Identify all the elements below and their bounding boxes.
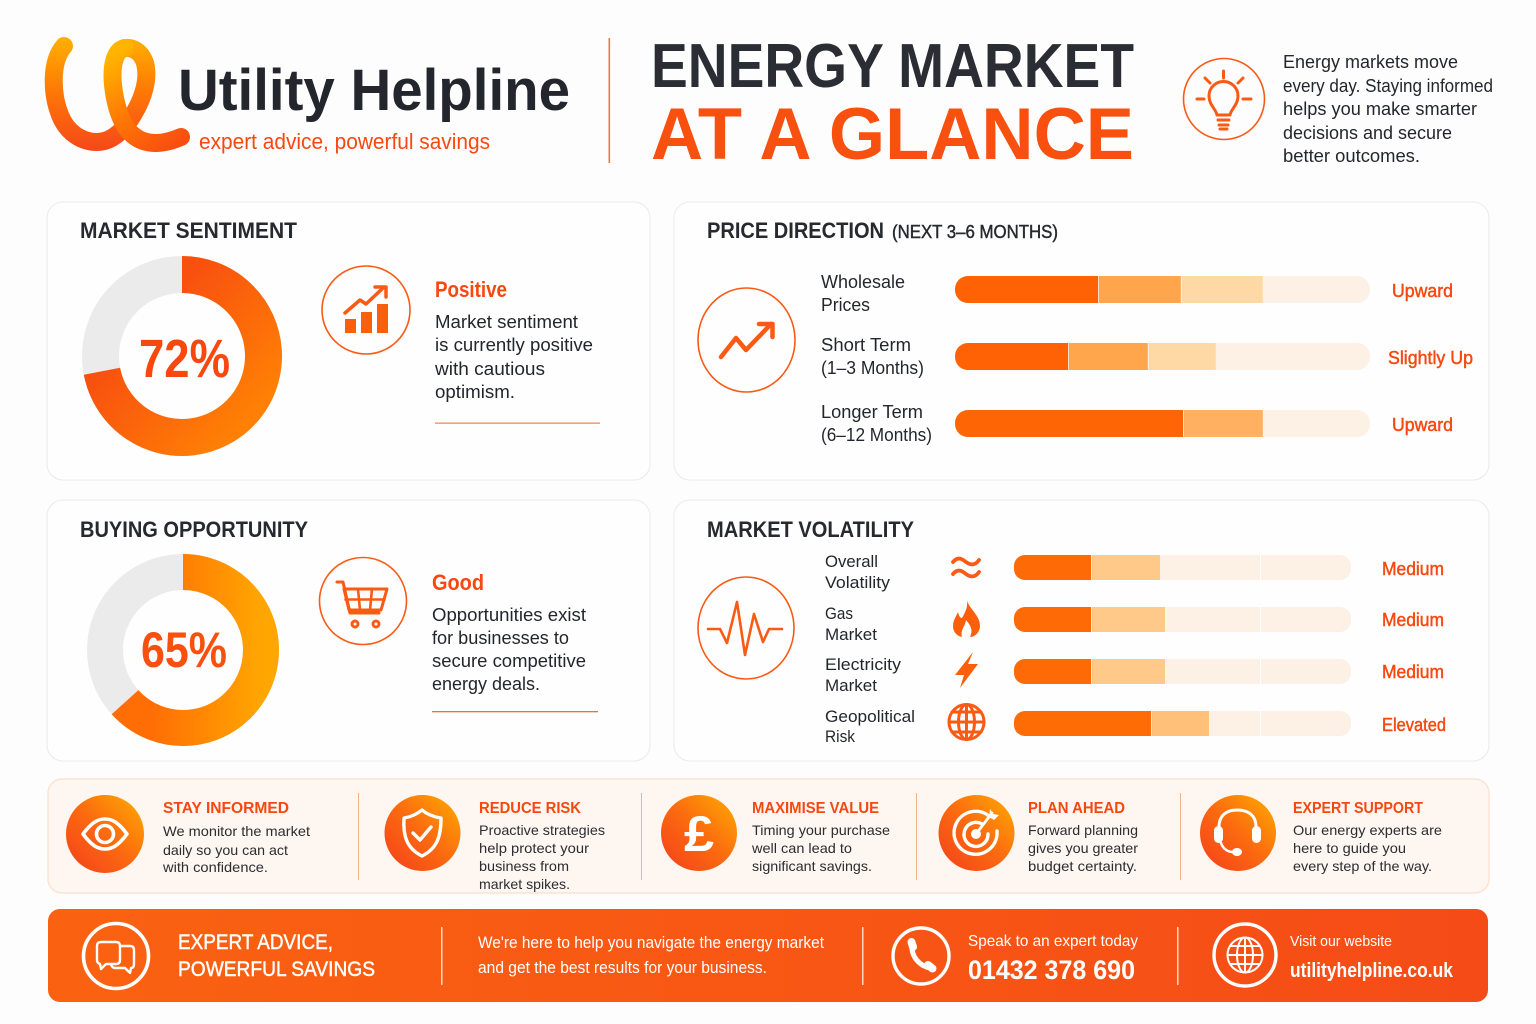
row: overall volatility [825, 552, 1444, 592]
logo: Utility Helpline [54, 46, 570, 154]
heading: MARKET VOLATILITY [707, 517, 914, 542]
icon: website globe [1214, 924, 1276, 986]
item: maximise value: significant savings. [752, 858, 872, 874]
row: electricity market: Market [825, 676, 877, 695]
item: stay informed: STAY INFORMED [163, 800, 289, 817]
item: maximise value [661, 795, 890, 874]
panel: buying opportunity [47, 500, 650, 761]
row: longer term: Upward [1392, 415, 1453, 435]
support message: We're here to help you navigate the energy market [478, 934, 824, 952]
phone contact: 01432 378 690 [968, 955, 1135, 985]
row: short term: Slightly Up [1388, 348, 1473, 368]
row: geopolitical risk [825, 704, 1446, 746]
row: geopolitical risk: Elevated [1382, 715, 1446, 735]
item: stay informed: with confidence. [162, 859, 268, 875]
description: Opportunities exist [432, 605, 586, 625]
item: stay informed: daily so you can act [163, 842, 288, 858]
row: gas market [825, 600, 1444, 644]
item: reduce risk [384, 795, 605, 892]
phone contact: Speak to an expert today [968, 933, 1138, 950]
panel: benefits strip [48, 779, 1489, 893]
icon: globe [949, 704, 984, 740]
item: expert support: here to guide you [1293, 840, 1406, 856]
item: maximise value: well can lead to [751, 840, 852, 856]
slogan: POWERFUL SAVINGS [178, 958, 375, 981]
title: ENERGY MARKET [651, 32, 1134, 101]
row: overall volatility: Volatility [825, 573, 891, 592]
row: short term: Short Term [821, 335, 911, 355]
status: good: Good [432, 570, 484, 595]
panel: market volatility [674, 500, 1489, 761]
icon: lightbulb [1184, 58, 1264, 140]
item: maximise value: MAXIMISE VALUE [752, 800, 879, 817]
slogan [178, 931, 375, 981]
intro text: helps you make smarter [1283, 99, 1477, 119]
slogan: EXPERT ADVICE, [178, 931, 333, 954]
icon: pound: £ [684, 806, 714, 862]
title [651, 32, 1134, 175]
icon: flame [953, 600, 980, 637]
icon: pound [661, 795, 737, 871]
intro text: decisions and secure [1283, 123, 1452, 143]
item: plan ahead: PLAN AHEAD [1028, 800, 1125, 817]
item: expert support: Our energy experts are [1293, 822, 1442, 838]
row: overall volatility: Overall [825, 552, 878, 571]
icon: waves [953, 559, 979, 576]
row: wholesale prices: Prices [821, 295, 870, 315]
item: reduce risk: business from [479, 858, 569, 874]
row: short term [821, 335, 1473, 378]
phone contact [968, 933, 1138, 985]
panel: market sentiment [47, 202, 650, 480]
row: electricity market [825, 652, 1444, 695]
item: plan ahead [938, 795, 1138, 874]
row: gas market: Market [825, 625, 877, 644]
item: expert support [1200, 795, 1442, 874]
description: with cautious [434, 359, 545, 379]
heading: PRICE DIRECTION [707, 218, 884, 243]
description [434, 312, 593, 402]
footer banner [48, 909, 1488, 1002]
row: gas market: Gas [825, 604, 853, 623]
description: is currently positive [435, 335, 593, 355]
item: expert support: every step of the way. [1293, 858, 1432, 874]
icon: lightning bolt [955, 652, 978, 688]
row: geopolitical risk: Risk [825, 727, 855, 746]
item: maximise value: Timing your purchase [752, 822, 890, 838]
website contact [1290, 934, 1454, 982]
website contact: utilityhelpline.co.uk [1290, 960, 1454, 982]
item: stay informed [66, 795, 310, 875]
heading [707, 218, 1058, 243]
donut chart: 65% [105, 572, 261, 728]
icon: pulse [698, 577, 794, 679]
icon: eye [66, 795, 144, 873]
icon: chat bubbles [84, 924, 148, 988]
support message: and get the best results for your business. [478, 959, 767, 977]
item: expert support: EXPERT SUPPORT [1293, 800, 1423, 817]
item: reduce risk: REDUCE RISK [479, 800, 581, 817]
heading: BUYING OPPORTUNITY [80, 517, 308, 542]
icon: phone [893, 928, 949, 984]
intro text [1283, 52, 1493, 166]
website contact: Visit our website [1290, 934, 1392, 950]
icon: shield [384, 795, 460, 871]
heading: MARKET SENTIMENT [80, 218, 297, 243]
row: longer term: Longer Term [821, 402, 923, 422]
row: overall volatility: Medium [1382, 559, 1444, 579]
description: energy deals. [432, 674, 540, 694]
icon: headset [1200, 795, 1276, 871]
row: electricity market: Medium [1382, 662, 1444, 682]
item: reduce risk: help protect your [479, 840, 589, 856]
row: electricity market: Electricity [825, 655, 902, 674]
item: reduce risk: Proactive strategies [479, 822, 605, 838]
row: wholesale prices [821, 274, 1452, 311]
item: stay informed: We monitor the market [163, 823, 310, 839]
status: positive: Positive [435, 277, 507, 302]
item: reduce risk: market spikes. [479, 876, 570, 892]
description [432, 605, 586, 694]
icon: shopping cart [320, 558, 406, 644]
intro text: better outcomes. [1283, 146, 1420, 166]
donut chart: 65%: 65% [141, 622, 227, 678]
description: for businesses to [432, 628, 569, 648]
description: optimism. [435, 382, 515, 402]
description: Market sentiment [435, 312, 578, 332]
intro text: every day. Staying informed [1283, 76, 1493, 96]
icon: trend arrow [698, 288, 795, 392]
row: geopolitical risk: Geopolitical [825, 707, 915, 726]
row: longer term: (6–12 Months) [821, 425, 932, 445]
item: plan ahead: Forward planning [1028, 822, 1138, 838]
donut chart: 72%: 72% [139, 329, 230, 389]
brand name: Utility Helpline [178, 58, 570, 123]
icon: target [938, 795, 1014, 871]
row: longer term [821, 402, 1453, 445]
item: plan ahead: budget certainty. [1028, 858, 1137, 874]
tagline: expert advice, powerful savings [199, 129, 490, 154]
icon: logo swirl [54, 46, 181, 143]
donut chart: 72% [100, 274, 264, 438]
icon: rising chart [322, 266, 410, 354]
row: gas market: Medium [1382, 610, 1444, 630]
heading: (NEXT 3–6 MONTHS) [892, 222, 1058, 242]
intro text: Energy markets move [1283, 52, 1458, 72]
description: secure competitive [432, 651, 586, 671]
row: short term: (1–3 Months) [821, 358, 924, 378]
item: plan ahead: gives you greater [1028, 840, 1138, 856]
panel: price direction [674, 202, 1489, 480]
row: wholesale prices: Upward [1392, 281, 1453, 301]
row: wholesale prices: Wholesale [821, 272, 905, 292]
support message [478, 934, 824, 977]
title: AT A GLANCE [651, 94, 1134, 175]
